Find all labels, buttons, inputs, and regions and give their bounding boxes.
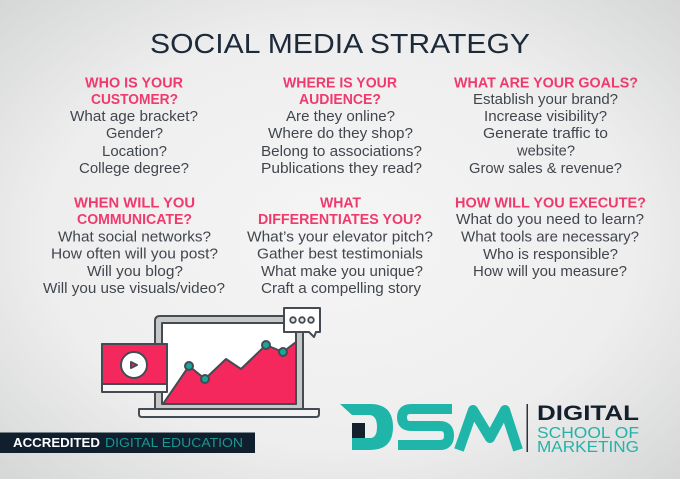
panel: what differentiates you: Craft a compelling story <box>261 280 422 297</box>
chart markers <box>185 341 287 383</box>
panel: where is your audience: Are they online? <box>286 108 395 125</box>
panel: when will you communicate: WHEN WILL YOU <box>74 196 195 212</box>
logo text: DIGITAL <box>537 402 639 425</box>
panel: what are your goals: WHAT ARE YOUR GOALS? <box>454 76 638 92</box>
badge: accredited digital education: DIGITAL EDUCATION <box>105 436 243 450</box>
panel: where is your audience <box>261 76 422 177</box>
logo: DSM: MARKETING <box>537 439 639 456</box>
icon: laptop with chart <box>102 308 320 417</box>
video card <box>102 344 167 392</box>
logo mark M <box>459 410 518 450</box>
panel: how will you execute: What do you need to learn? <box>456 211 644 228</box>
title: SOCIAL MEDIA STRATEGY <box>150 28 530 59</box>
panel: when will you communicate: COMMUNICATE? <box>77 212 192 228</box>
logo mark D <box>340 404 393 450</box>
panel: what differentiates you: What’s your elevator pitch? <box>247 228 433 246</box>
panel: who is your customer: Gender? <box>106 125 163 142</box>
panel: where is your audience: WHERE IS YOUR <box>283 76 398 92</box>
logo: DSM <box>340 402 639 456</box>
panel: when will you communicate: Will you blog? <box>87 263 183 280</box>
panel: what are your goals: Establish your brand? <box>473 91 618 108</box>
panel: who is your customer: What age bracket? <box>70 108 198 125</box>
panel: how will you execute: Who is responsible? <box>483 246 618 263</box>
badge: accredited digital education: ACCREDITED <box>13 436 100 450</box>
panel: what are your goals: Grow sales & revenue? <box>469 160 622 177</box>
panel: who is your customer: College degree? <box>79 160 189 177</box>
speech bubble <box>284 308 320 337</box>
panel: who is your customer: WHO IS YOUR <box>85 76 184 92</box>
panel: how will you execute: HOW WILL YOU EXECUTE? <box>455 196 646 212</box>
panel: where is your audience: Publications they read? <box>261 160 422 177</box>
panel: what are your goals: Generate traffic to <box>483 125 608 142</box>
logo mark S <box>398 409 452 445</box>
panel: where is your audience: AUDIENCE? <box>299 92 381 108</box>
panel: what differentiates you: What make you unique? <box>261 263 423 280</box>
panel: what are your goals: website? <box>516 142 575 160</box>
logo: DSM: SCHOOL OF <box>537 425 639 442</box>
panel: how will you execute: How will you measure? <box>473 263 627 280</box>
panel: when will you communicate <box>43 196 225 297</box>
panel: what are your goals <box>454 76 638 177</box>
panel: what are your goals: Increase visibility? <box>484 108 607 125</box>
panel: who is your customer <box>70 76 198 177</box>
panel: what differentiates you: WHAT <box>320 196 361 212</box>
panel: when will you communicate: How often will you post? <box>51 246 218 262</box>
chart area <box>163 342 296 404</box>
panel: what differentiates you: Gather best testimonials <box>257 246 423 262</box>
badge: accredited digital education <box>0 432 255 453</box>
panel: how will you execute <box>455 196 646 280</box>
panel: when will you communicate: What social networks? <box>58 228 211 246</box>
panel: who is your customer: Location? <box>102 143 167 160</box>
panel: where is your audience: Belong to associations? <box>261 143 422 160</box>
panel: what differentiates you: DIFFERENTIATES YOU? <box>258 212 422 228</box>
panel: how will you execute: What tools are necessary? <box>461 228 639 246</box>
panel: who is your customer: CUSTOMER? <box>91 92 178 108</box>
panel: where is your audience: Where do they shop? <box>268 125 413 142</box>
panel: when will you communicate: Will you use visuals/video? <box>43 280 225 297</box>
panel: what differentiates you <box>247 196 433 297</box>
